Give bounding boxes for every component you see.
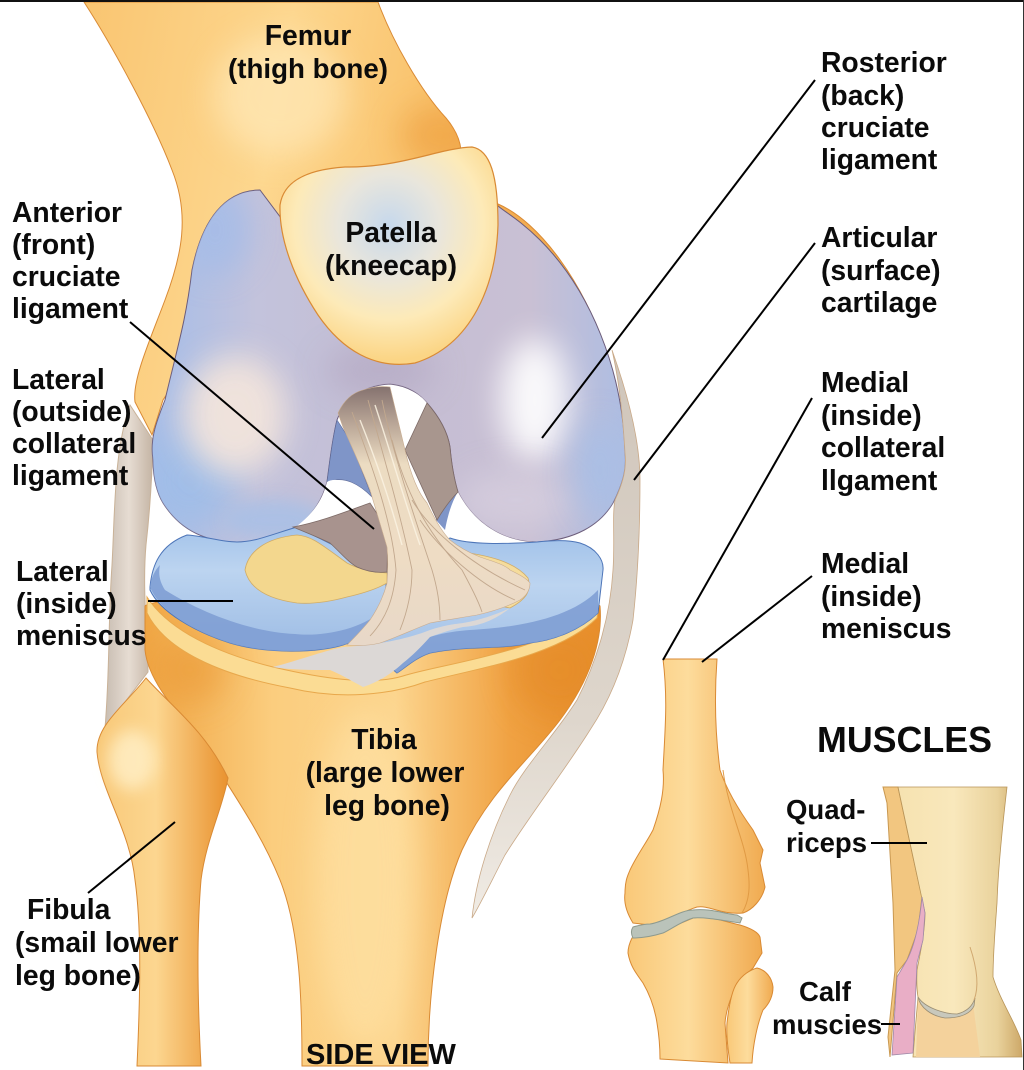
label: femur xyxy=(228,19,388,84)
label: calf muscles xyxy=(772,976,882,1040)
label: lateral meniscus: meniscus xyxy=(16,619,147,651)
kneecap cartilage crescent xyxy=(918,997,975,1018)
heading: muscles: MUSCLES xyxy=(817,720,992,760)
label: lateral meniscus xyxy=(16,555,147,651)
medial tibial surface xyxy=(445,552,529,608)
label: fibula: Fibula xyxy=(27,893,111,925)
label: patella: (kneecap) xyxy=(325,249,457,281)
calf pink muscle xyxy=(892,897,925,1055)
inset cartilage xyxy=(632,910,742,938)
label: lateral collateral ligament: (outside) xyxy=(12,395,131,427)
lower grey fibres xyxy=(273,608,510,687)
label: articular cartilage: cartilage xyxy=(821,286,937,318)
label: lateral collateral ligament xyxy=(12,363,136,491)
label: fibula: (smail lower xyxy=(15,926,179,958)
label: calf muscles: muscies xyxy=(772,1009,882,1040)
label: medial collateral ligament: Medial xyxy=(821,366,909,398)
label: posterior cruciate ligament: ligament xyxy=(821,143,938,175)
inset: muscles xyxy=(883,787,1022,1057)
hamstring back muscle xyxy=(883,787,922,1057)
label: anterior cruciate ligament xyxy=(12,196,129,324)
inset femur xyxy=(625,659,765,925)
label: lateral collateral ligament: collateral xyxy=(12,427,136,459)
inset fibula xyxy=(727,968,773,1063)
label: anterior cruciate ligament: cruciate xyxy=(12,260,121,292)
tibia xyxy=(145,594,608,1066)
label: anterior cruciate ligament: ligament xyxy=(12,292,129,324)
label: quadriceps: Quad- xyxy=(786,794,865,825)
femur rim behind condyle xyxy=(498,204,605,350)
label: femur: Femur xyxy=(265,19,351,51)
label: calf muscles: Calf xyxy=(799,976,852,1007)
posterior cruciate ligament xyxy=(293,403,458,572)
label: anterior cruciate ligament: Anterior xyxy=(12,196,122,228)
label: posterior cruciate ligament: cruciate xyxy=(821,111,930,143)
quadriceps muscle xyxy=(898,787,1022,1057)
label: articular cartilage: Articular xyxy=(821,221,937,253)
label: medial meniscus: (inside) xyxy=(821,580,922,612)
label: medial collateral ligament: llgament xyxy=(821,464,938,496)
label: lateral meniscus: (inside) xyxy=(16,587,117,619)
label: posterior cruciate ligament xyxy=(821,46,947,175)
lateral meniscus xyxy=(150,527,387,651)
label: tibia: leg bone) xyxy=(324,789,450,821)
label: posterior cruciate ligament: (back) xyxy=(821,79,904,111)
lateral tibial surface xyxy=(245,535,387,603)
main knee illustration xyxy=(84,2,640,1066)
label: patella xyxy=(325,216,457,281)
label: lateral collateral ligament: ligament xyxy=(12,459,129,491)
label: fibula: leg bone) xyxy=(15,959,141,991)
leader lines xyxy=(88,80,927,1024)
label: tibia: Tibia xyxy=(351,723,417,755)
label: lateral meniscus: Lateral xyxy=(16,555,109,587)
tibial plateau rim xyxy=(147,597,598,695)
label: tibia xyxy=(306,723,464,821)
notch interior blue bands xyxy=(327,420,372,497)
label: medial collateral ligament: collateral xyxy=(821,431,945,463)
gaps between condyles and meniscus xyxy=(297,480,537,542)
label: medial meniscus xyxy=(821,547,952,644)
label: medial collateral ligament: (inside) xyxy=(821,399,922,431)
lateral collateral ligament xyxy=(105,405,153,728)
medial collateral ligament xyxy=(472,350,640,918)
label: femur: (thigh bone) xyxy=(228,53,388,84)
anterior cruciate ligament xyxy=(338,387,530,646)
label: patella: Patella xyxy=(345,216,437,248)
label: articular cartilage: (surface) xyxy=(821,254,941,286)
inset: bones side view xyxy=(625,659,773,1063)
label: medial meniscus: meniscus xyxy=(821,612,952,644)
label: quadriceps: riceps xyxy=(786,827,867,858)
femoral condyles xyxy=(144,184,625,542)
medial meniscus xyxy=(370,538,603,673)
label: medial meniscus: Medial xyxy=(821,547,909,579)
opening in the notch xyxy=(390,386,427,450)
label: posterior cruciate ligament: Rosterior xyxy=(821,46,947,78)
label: anterior cruciate ligament: (front) xyxy=(12,228,95,260)
label: tibia: (large lower xyxy=(306,756,464,788)
femur xyxy=(84,2,605,435)
fibula xyxy=(97,678,228,1066)
knee region below kneecap xyxy=(916,997,980,1057)
inset tibia xyxy=(628,917,762,1063)
label: lateral collateral ligament: Lateral xyxy=(12,363,105,395)
label: fibula xyxy=(15,893,179,991)
label: medial collateral ligament xyxy=(821,366,945,496)
label: quadriceps xyxy=(786,794,867,858)
patella xyxy=(280,147,498,364)
label: articular cartilage xyxy=(821,221,941,318)
